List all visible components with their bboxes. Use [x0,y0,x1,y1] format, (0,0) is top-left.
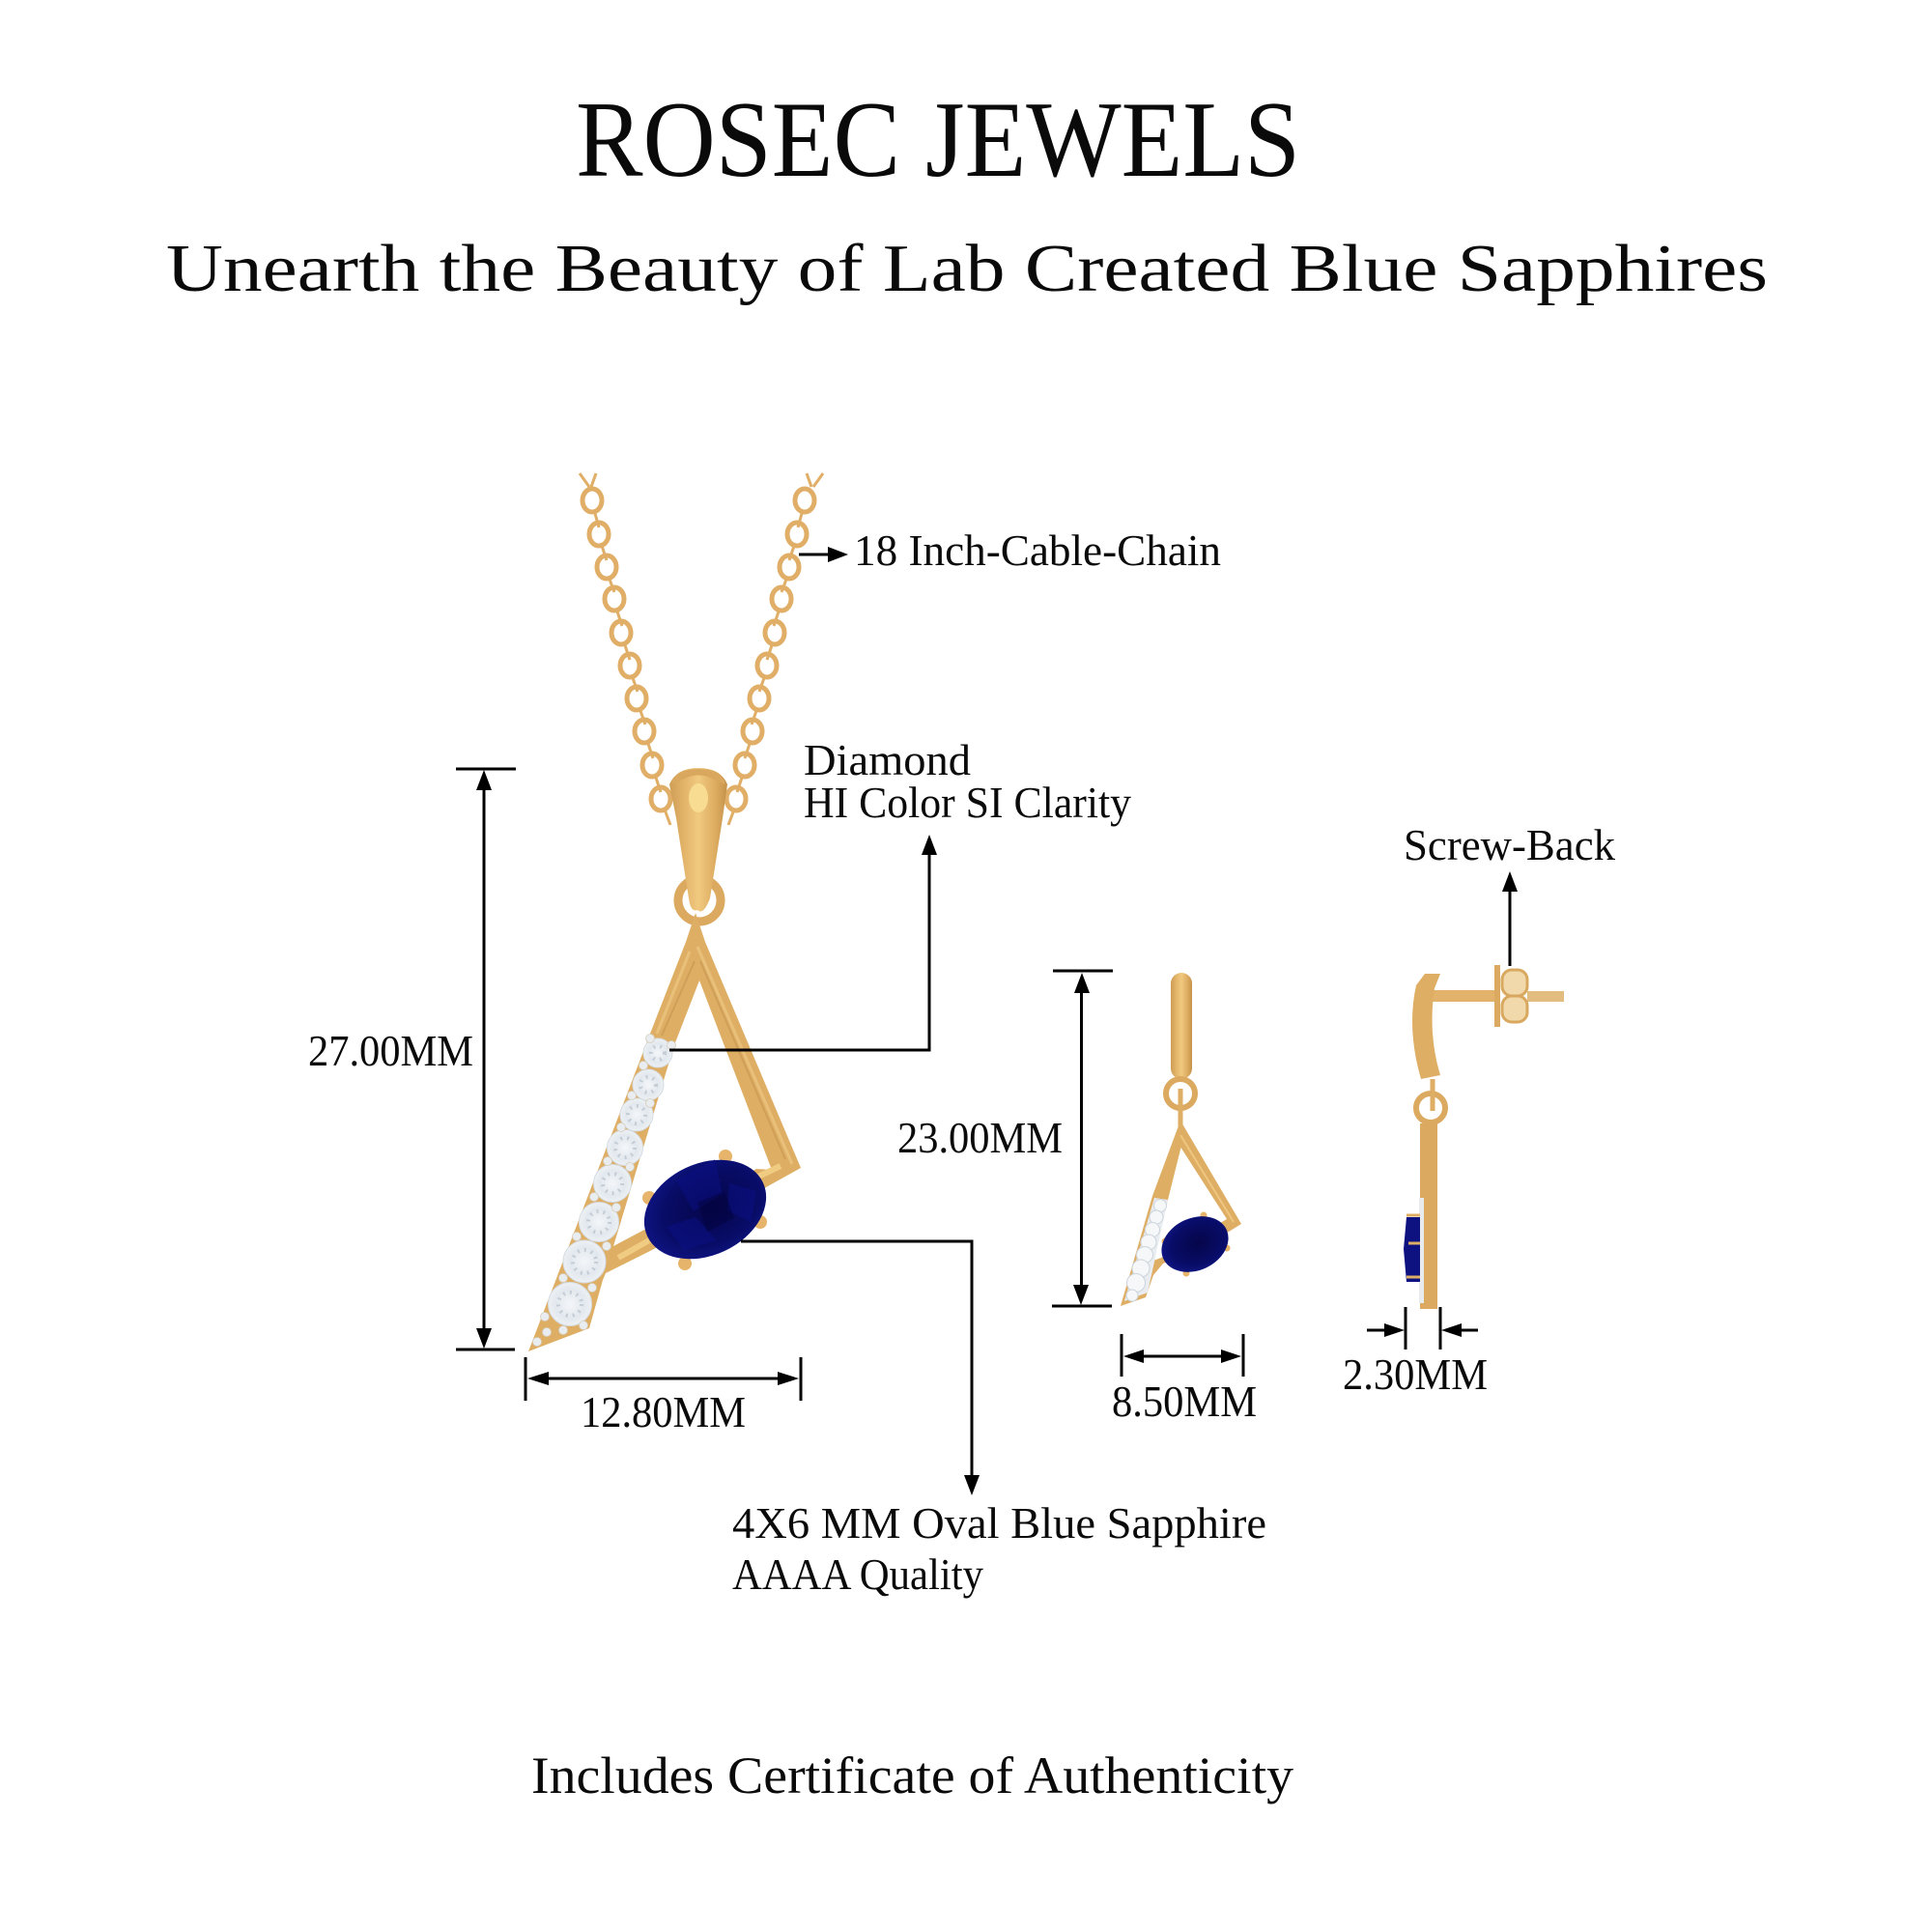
title: ROSEC JEWELS [576,80,1300,200]
label: 23.00MM: 23.00MM [897,1113,1063,1162]
label: diamond: Diamond [804,735,971,784]
diamonds [533,1034,676,1347]
sapphire [628,1141,782,1278]
pendant triangle with diamonds and oval sapphire [528,913,801,1351]
arrow: screw-back [1502,871,1518,966]
footer note: Includes Certificate of Authenticity [531,1747,1293,1804]
label: diamond [804,735,1131,827]
arrow: sapphire leader [741,1241,980,1495]
label: sapphire [732,1498,1266,1599]
label: 27.00MM: 27.00MM [308,1026,473,1075]
subtitle: Unearth the Beauty of Lab Created Blue Sapphires [166,232,1768,306]
dimension: earring height [1052,971,1113,1306]
dimension: earring thickness [1367,1307,1478,1350]
pendant bail and jump ring [669,768,727,922]
dimension: earring width [1122,1334,1243,1377]
label: 12.80MM: 12.80MM [581,1387,746,1436]
label: diamond: HI Color SI Clarity [804,778,1131,827]
label: 8.50MM: 8.50MM [1112,1377,1257,1426]
pendant frame [528,913,801,1351]
label: chain: 18 Inch-Cable-Chain [854,526,1221,575]
label: screw-back: Screw-Back [1404,820,1615,869]
dimension: pendant height [456,769,516,1350]
earring side view [1404,965,1564,1309]
arrow: chain label [799,547,848,562]
label: 2.30MM: 2.30MM [1343,1350,1488,1399]
earring front view [1121,973,1241,1306]
necklace chain [580,473,823,825]
label: sapphire: 4X6 MM Oval Blue Sapphire [732,1498,1266,1548]
arrow: diamond leader [669,835,937,1050]
label: sapphire: AAAA Quality [732,1549,983,1599]
dimension: pendant width [526,1357,801,1401]
